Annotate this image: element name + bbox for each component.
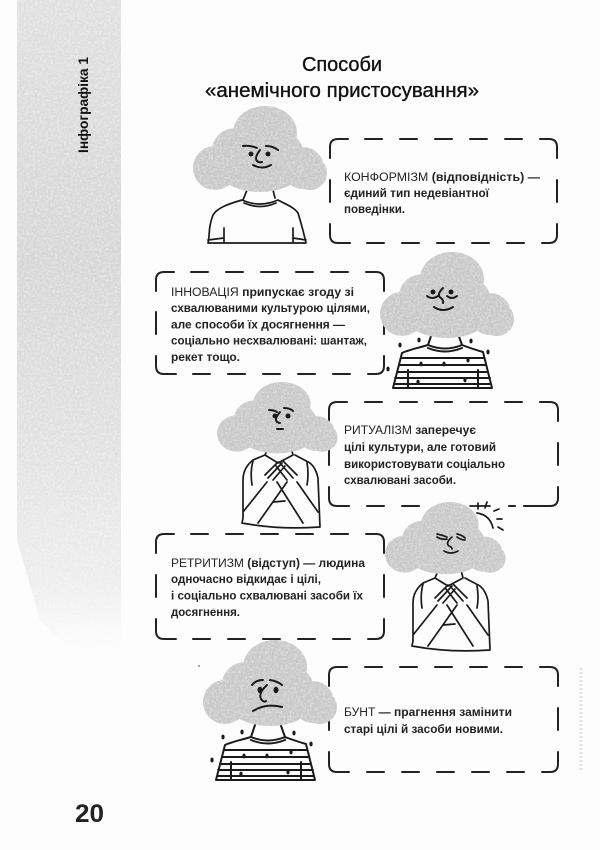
panel: ritualism box: використовувати соціально	[344, 459, 505, 471]
panel: retreatism box: одночасно відкидає і цілі,	[171, 574, 321, 586]
icon: rain drops	[386, 338, 490, 384]
figure: sad person in striped shirt with drops	[203, 640, 337, 780]
title: Способи	[302, 54, 382, 76]
panel: rebellion box: старі цілі й засоби новими.	[344, 724, 503, 736]
panel: conformism box: КОНФОРМІЗМ (відповідність) —	[344, 172, 541, 184]
page number: 20	[75, 800, 104, 828]
figure: calm person in white T-shirt	[193, 106, 327, 243]
panel: innovation box: соціально несхвалювані: шантаж,	[171, 336, 367, 348]
icon: sun rays	[470, 502, 503, 530]
panel: innovation box: рекет тощо.	[171, 352, 240, 364]
panel: ritualism box: схвалювані засоби.	[344, 475, 456, 487]
panel: innovation box	[156, 272, 384, 374]
panel: innovation box: але способи їх досягнення —	[171, 320, 346, 332]
panel: retreatism box: досягнення.	[171, 607, 240, 619]
side strip: grey textured band	[17, 0, 121, 650]
panel: innovation box: ІННОВАЦІЯ припускає згоду зі	[171, 287, 354, 299]
figure: worried person with hands on chest	[217, 382, 338, 528]
icon: rain drops	[210, 730, 313, 776]
panel: retreatism box: і соціально схвалювані засоби їх	[171, 590, 364, 602]
panel: retreatism box	[156, 534, 384, 639]
panel: conformism box: поведінки.	[344, 204, 405, 216]
figure: person with eyes closed and sun rays	[385, 502, 506, 651]
panel: ritualism box: цілі культури, але готовий	[344, 442, 496, 454]
title: «анемічного пристосування»	[205, 80, 479, 102]
figure: happy person in striped shirt with drops	[380, 252, 514, 388]
panel: ritualism box	[329, 402, 558, 506]
panel: rebellion box	[329, 667, 558, 772]
panel: innovation box: схвалюваними культурою цілями,	[171, 303, 370, 315]
panel: ritualism box: РИТУАЛІЗМ заперечує	[344, 425, 477, 437]
side label: Інфографіка 1: Інфографіка 1	[75, 57, 91, 153]
panel: conformism box: єдиний тип недевіантної	[344, 188, 490, 200]
title	[205, 54, 479, 102]
panel: retreatism box: РЕТРИТИЗМ (відступ) — людина	[171, 558, 366, 570]
panel: rebellion box: БУНТ — прагнення замінити	[344, 707, 512, 719]
panel: conformism box	[330, 139, 557, 243]
